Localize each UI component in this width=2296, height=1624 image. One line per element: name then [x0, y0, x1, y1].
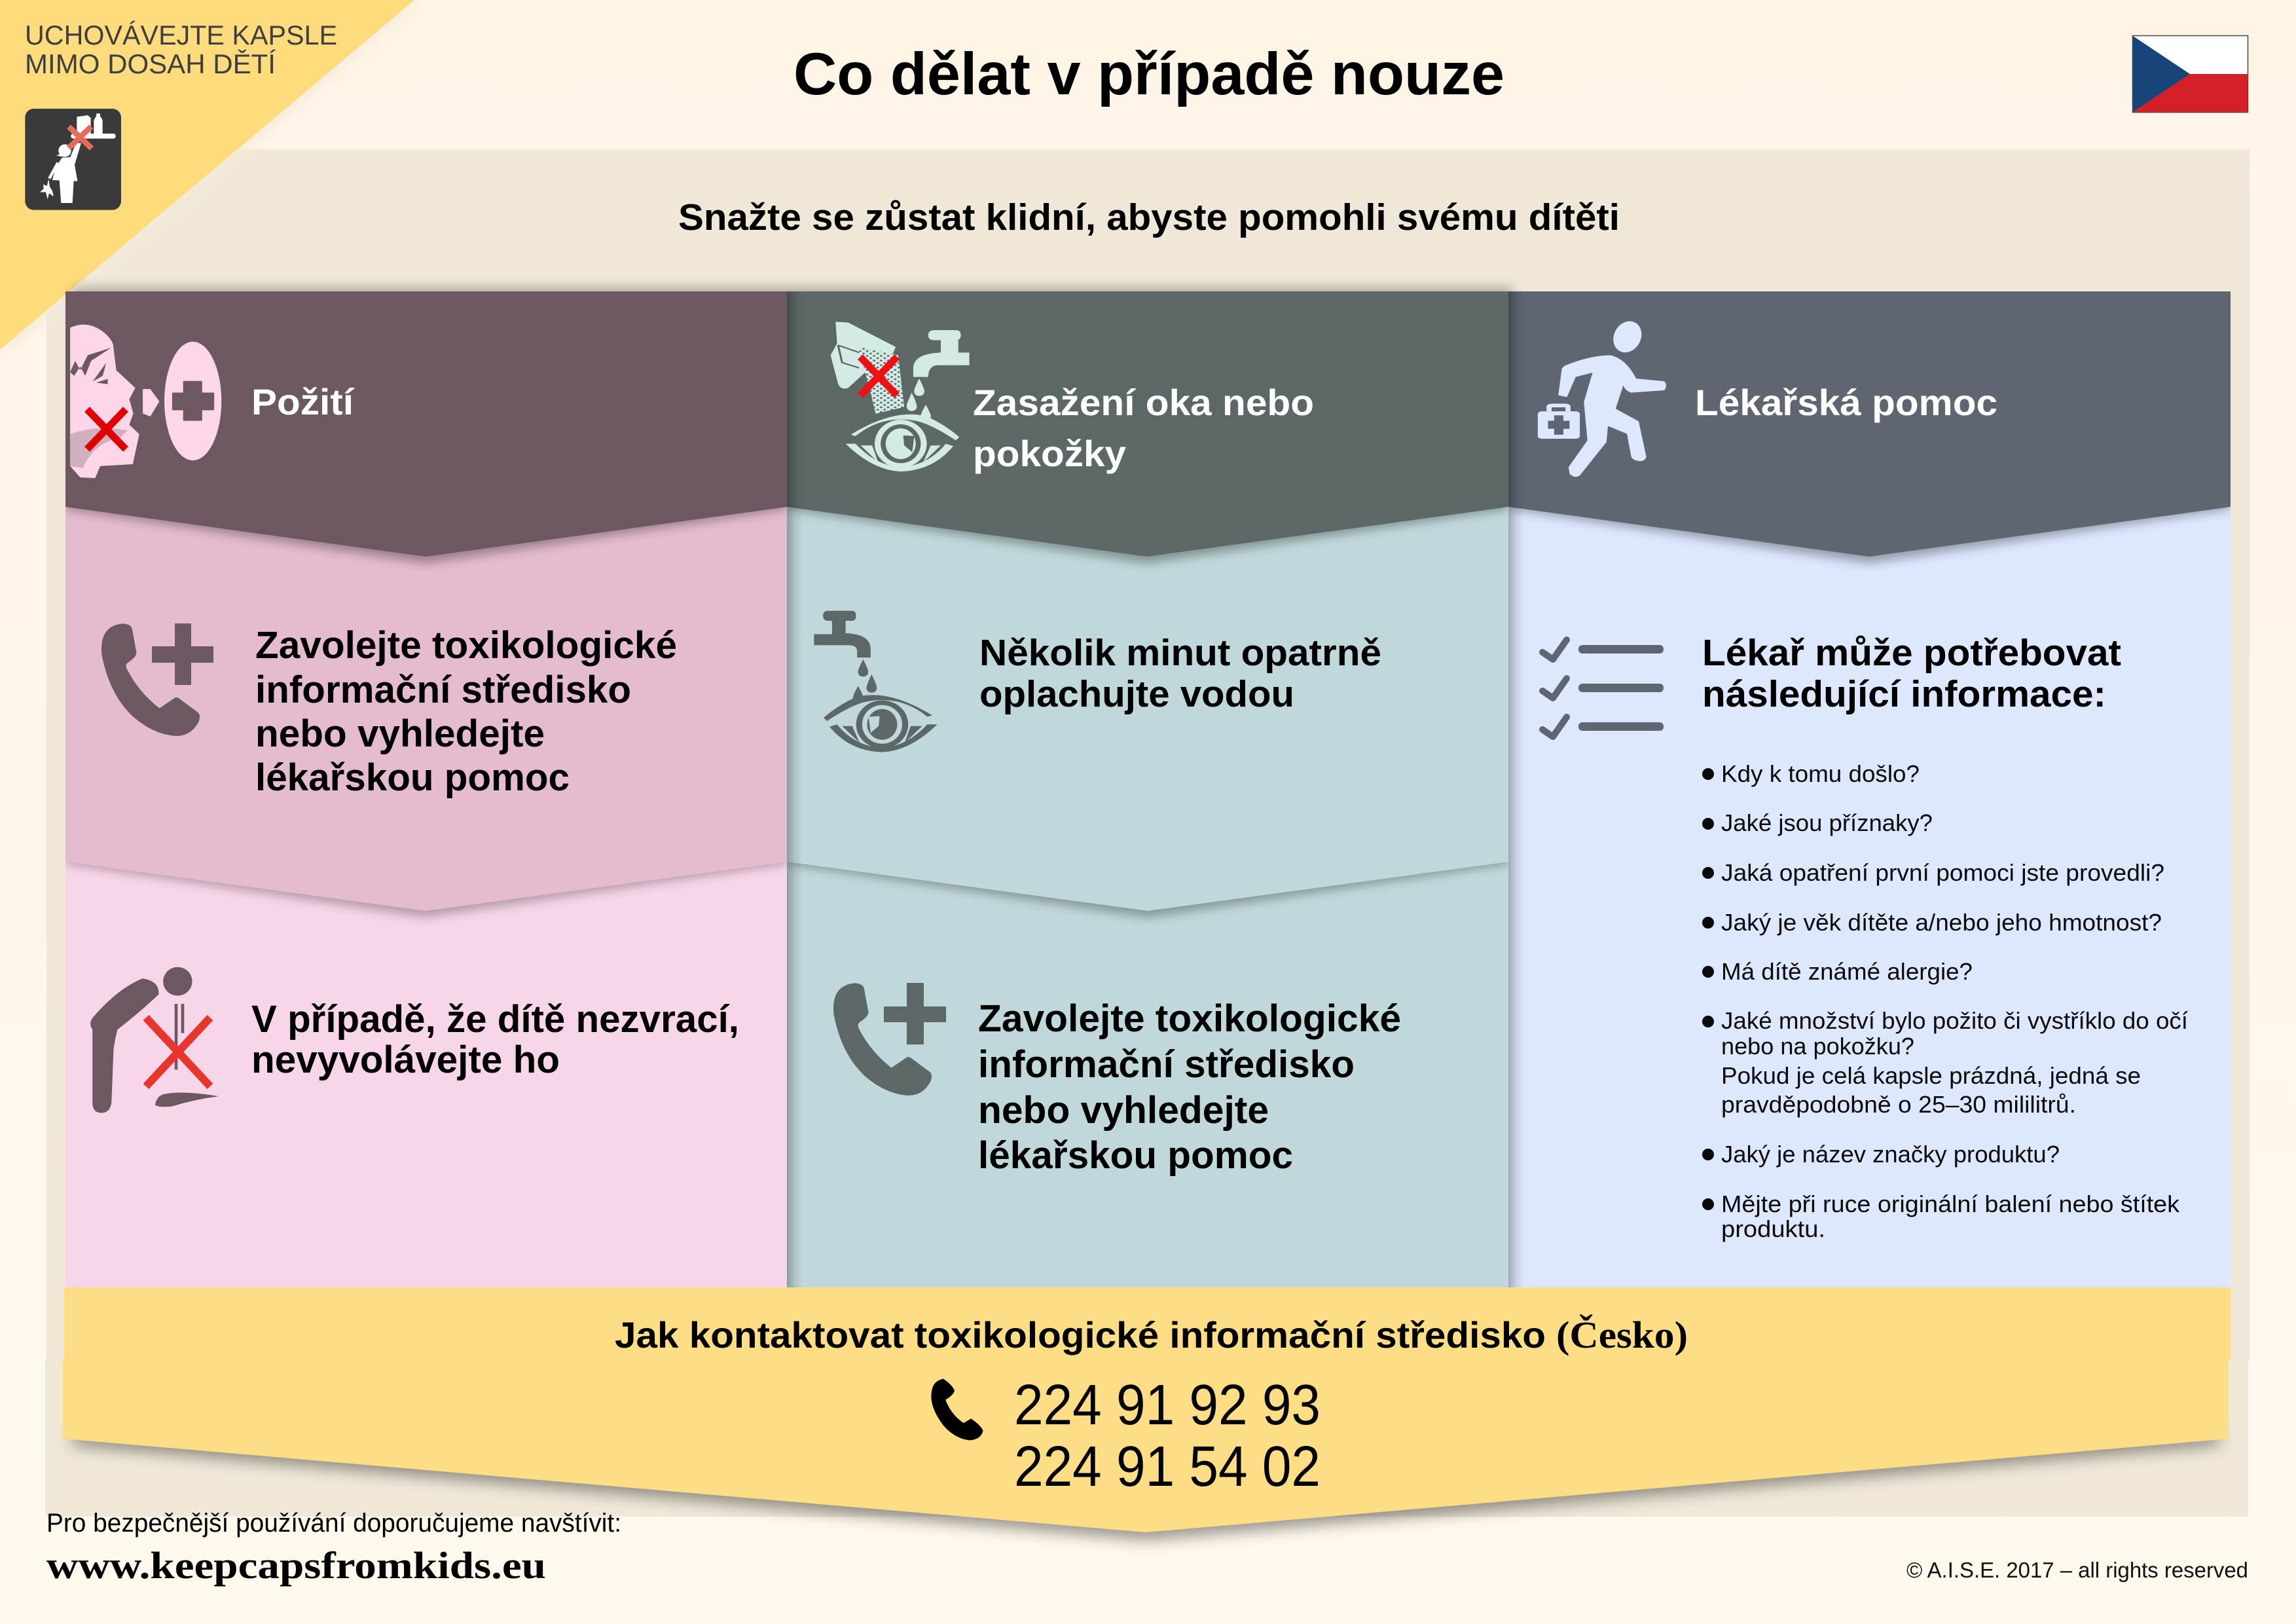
icon: child reaching for shelf [25, 109, 121, 210]
contact heading: (Česko) [1556, 1314, 1688, 1356]
text: call poison centre [255, 624, 677, 799]
text: call poison centre: informační středisko [255, 669, 631, 711]
heading: eye or skin contact: pokožky [973, 433, 1126, 474]
icon: phone with plus [101, 623, 213, 736]
bullet list: questions: pravděpodobně o 25–30 mililitrů. [1721, 1091, 2076, 1118]
icon: do not induce vomiting [90, 967, 219, 1113]
text: do not induce vomiting: nevyvolávejte ho [251, 1039, 560, 1081]
bullet list: questions [1702, 760, 2188, 1242]
text: do not induce vomiting: V případě, že dítě nezvrací, [251, 998, 739, 1041]
column edge shadow [787, 291, 803, 1287]
panel: eye or skin contact column [787, 291, 1508, 1287]
bullet list: questions: produktu. [1721, 1215, 1825, 1242]
contact heading: Jak kontaktovat toxikologické informační středisko [615, 1314, 1546, 1356]
heading: information the doctor may need [1702, 632, 2121, 715]
text: rinse with water [979, 632, 1381, 715]
column edge shadow [1508, 291, 1524, 1287]
bullet list: questions: Pokud je celá kapsle prázdná, jedná se [1721, 1062, 2141, 1089]
text: call poison centre: lékařskou pomoc [255, 756, 570, 799]
phone numbers: 224 91 92 93 [1014, 1373, 1321, 1437]
panel: medical help column [1508, 291, 2231, 1287]
bullet list: questions: Má dítě známé alergie? [1721, 958, 1973, 985]
top shadow behind columns [72, 287, 1512, 306]
text: call poison centre: nebo vyhledejte [255, 712, 545, 755]
text: call poison centre: nebo vyhledejte [978, 1089, 1269, 1132]
subtitle: Snažte se zůstat klidní, abyste pomohli svému dítěti [678, 196, 1620, 238]
bullet list: questions: Kdy k tomu došlo? [1721, 760, 1920, 787]
text: call poison centre: Zavolejte toxikologické [978, 997, 1401, 1040]
text: call poison centre [978, 997, 1401, 1177]
icon: face with cross and medical oval [70, 325, 221, 478]
footer: copyright: © A.I.S.E. 2017 – all rights reserved [1906, 1558, 2248, 1582]
heading: medical help: Lékařská pomoc [1695, 382, 1997, 423]
panel: poison centre contact banner [63, 1287, 2231, 1540]
heading: eye or skin contact: Zasažení oka nebo [973, 382, 1314, 423]
banner text: MIMO DOSAH DĚTÍ [25, 48, 276, 79]
icon: capsule, tap and eye [831, 322, 970, 471]
heading: ingestion: Požití [251, 381, 355, 422]
icon: running person with medical bag [1538, 320, 1666, 477]
corner banner: keep capsules away from children [0, 0, 422, 358]
text: call poison centre: Zavolejte toxikologické [255, 624, 677, 667]
text: call poison centre: lékařskou pomoc [978, 1134, 1293, 1177]
banner text [25, 20, 337, 79]
bullet list: questions: Mějte při ruce originální balení nebo štítek [1721, 1190, 2180, 1217]
icon: checklist [1542, 640, 1664, 737]
icon: telephone handset [931, 1378, 983, 1440]
phone numbers: 224 91 54 02 [1014, 1435, 1321, 1498]
bullet list: questions: Jaká opatření první pomoci jste provedli? [1721, 859, 2164, 886]
icon: tap rinsing eye [814, 611, 938, 752]
title: Co dělat v případě nouze [793, 41, 1504, 107]
heading: information the doctor may need: Lékař může potřebovat [1702, 632, 2121, 674]
bullet list: questions: Jaké jsou příznaky? [1721, 809, 1933, 836]
footer: safer use note: Pro bezpečnější používání doporučujeme navštívit: [46, 1509, 621, 1538]
heading: eye or skin contact [973, 382, 1314, 474]
panel: ingestion column [65, 291, 787, 1287]
bullet list: questions: Jaké množství bylo požito či vystříklo do očí [1721, 1007, 2188, 1034]
text: rinse with water: Několik minut opatrně [979, 632, 1381, 674]
bullet list: questions: Jaký je věk dítěte a/nebo jeho hmotnost? [1721, 909, 2162, 936]
bullet list: questions: nebo na pokožku? [1721, 1033, 1914, 1060]
footer: website: www.keepcapsfromkids.eu [46, 1544, 546, 1587]
text: rinse with water: oplachujte vodou [979, 673, 1294, 715]
text: call poison centre: informační středisko [978, 1043, 1355, 1086]
icon: phone with plus [833, 983, 946, 1096]
bullet list: questions: Jaký je název značky produktu? [1721, 1141, 2060, 1168]
phone numbers [1014, 1373, 1321, 1498]
text: do not induce vomiting [251, 998, 739, 1081]
flag: Czech Republic [2133, 35, 2248, 113]
heading: information the doctor may need: následující informace: [1702, 673, 2106, 715]
banner text: UCHOVÁVEJTE KAPSLE [25, 20, 337, 50]
